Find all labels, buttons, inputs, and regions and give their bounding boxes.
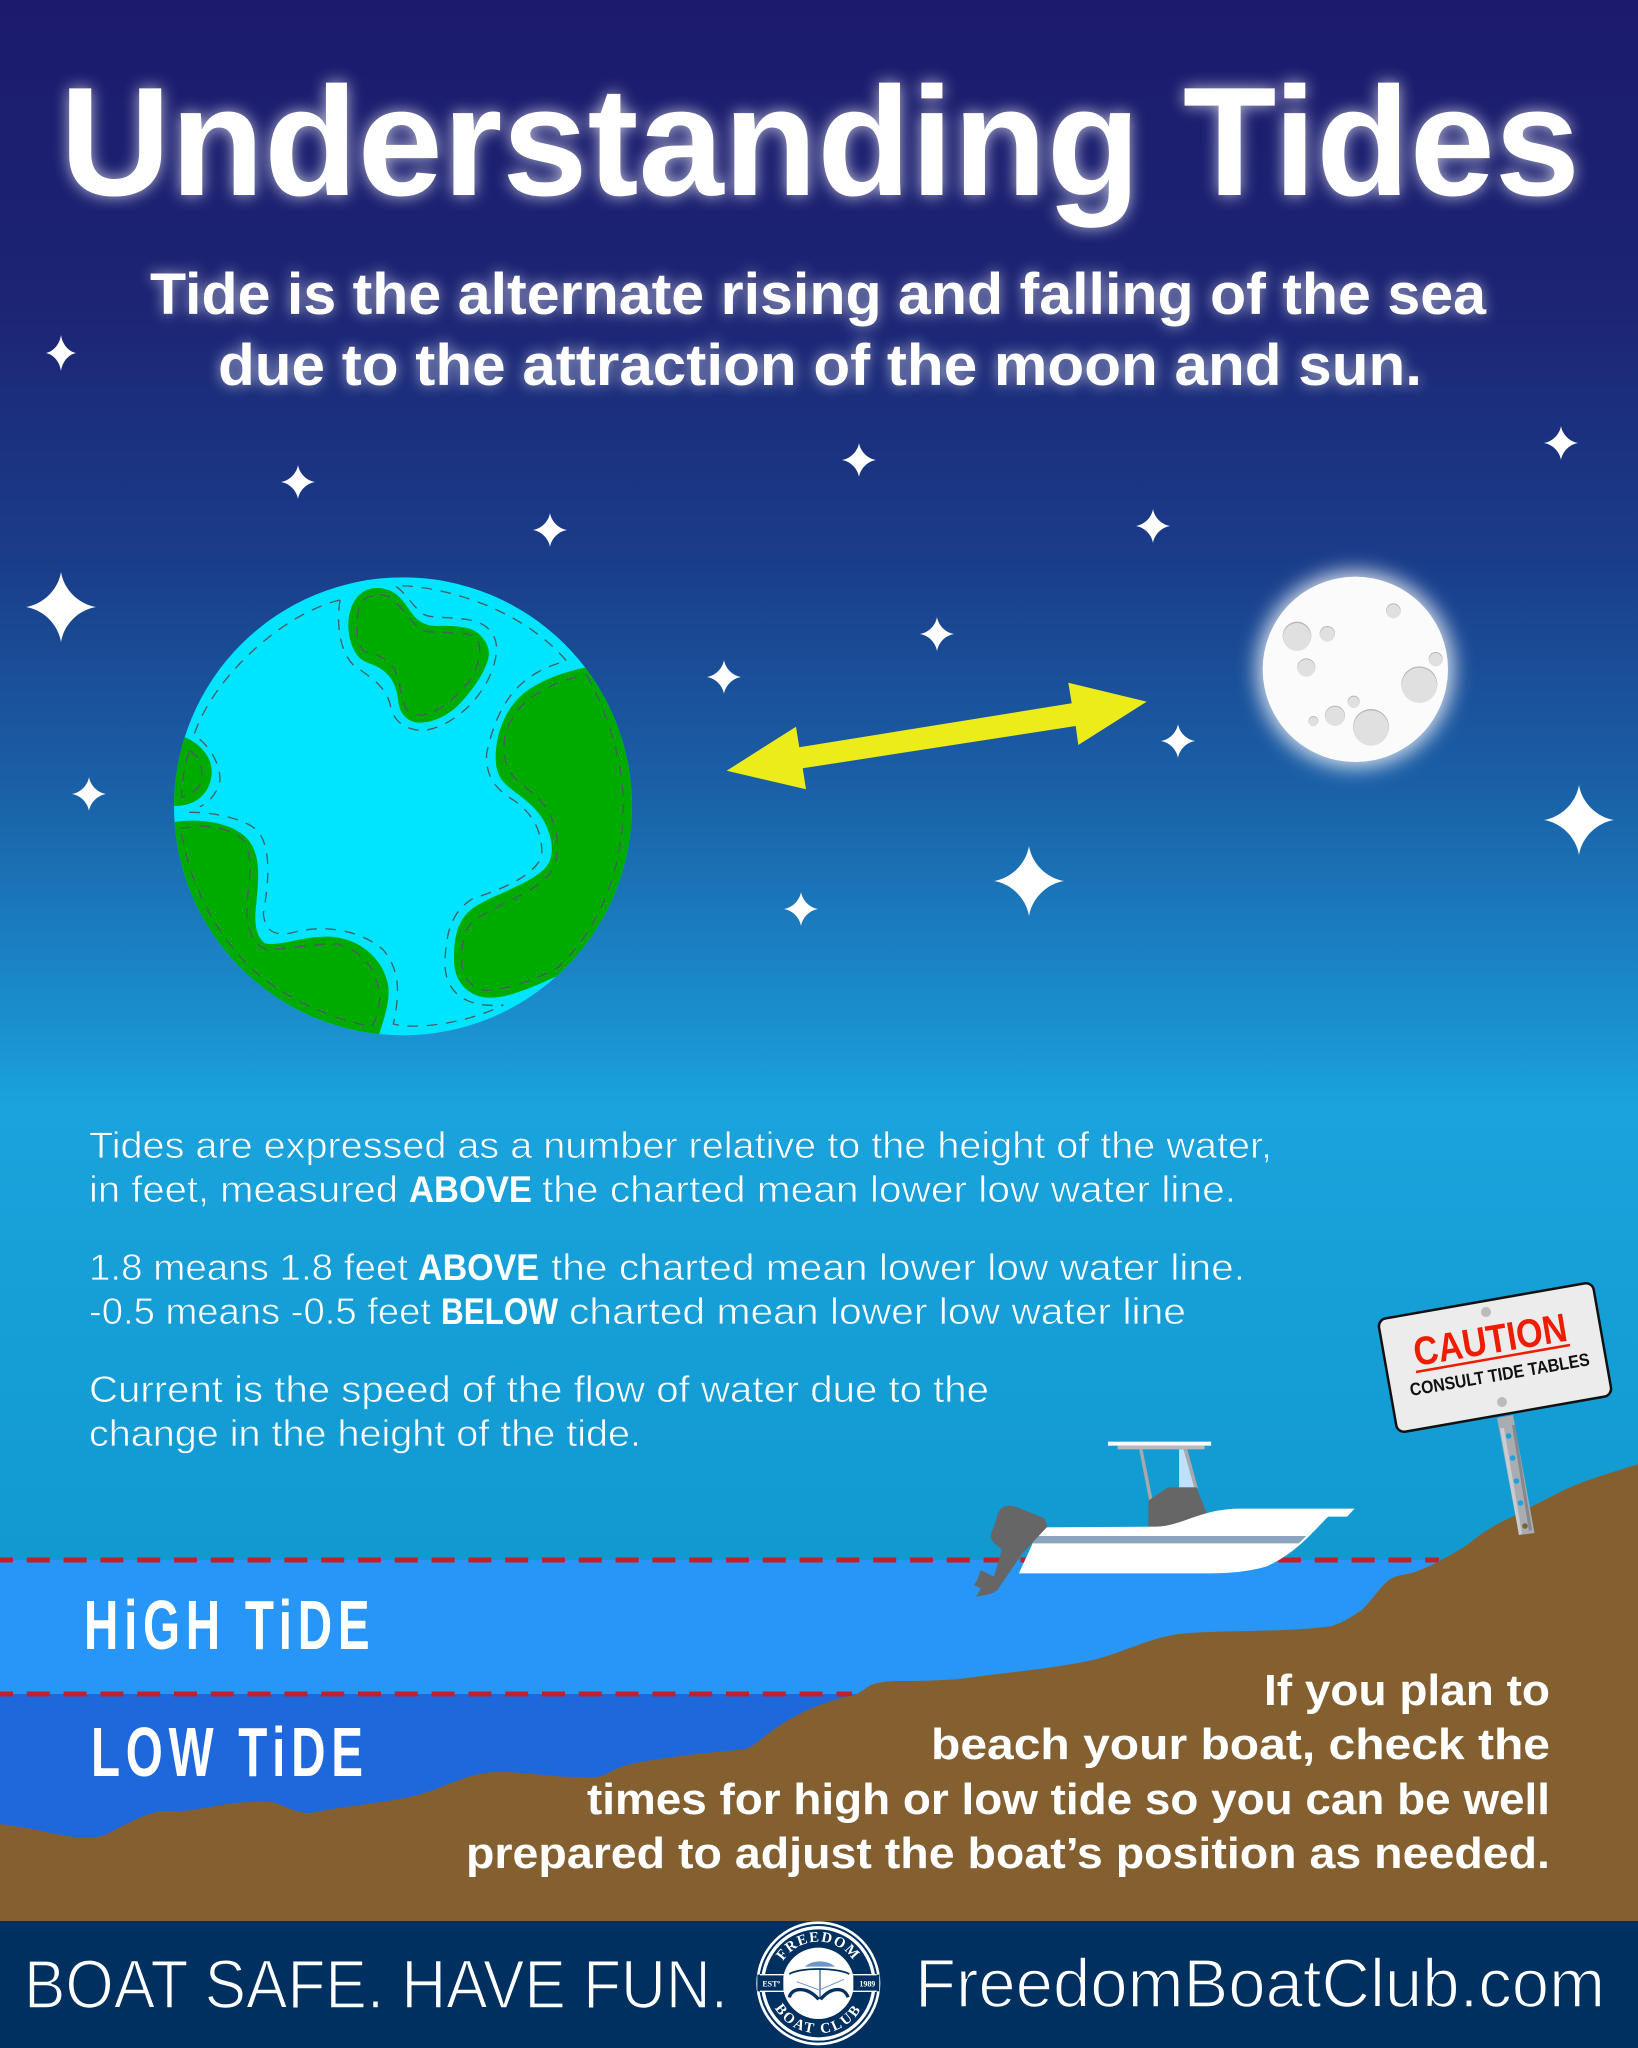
title: Understanding Tides — [60, 55, 1580, 228]
logo: Freedom Boat Club badge: FREEDOM — [776, 1932, 860, 1961]
text block: tide explanation: Current is the speed of the flow of water due to the — [89, 1369, 989, 1410]
label: low tide: LOW TiDE — [91, 1713, 363, 1791]
text block: tide explanation — [89, 1125, 1272, 1454]
text block: tide explanation: charted mean lower low water line — [569, 1291, 1186, 1332]
high tide dashed line — [0, 1558, 1439, 1562]
logo: Freedom Boat Club badge: 1989 — [859, 1979, 875, 1988]
subtitle: due to the attraction of the moon and sun. — [218, 333, 1422, 398]
text block: beach advice: If you plan to — [1264, 1666, 1550, 1715]
arrow: earth to moon double-headed — [727, 683, 1147, 789]
earth — [150, 577, 650, 1035]
high tide water band — [0, 1560, 1638, 1694]
logo: Freedom Boat Club badge: ESTº — [762, 1979, 780, 1988]
moon — [1257, 571, 1454, 768]
boat — [974, 1442, 1355, 1597]
caution sign: CAUTION — [1410, 1306, 1570, 1375]
text block: tide explanation: ABOVE — [418, 1247, 539, 1288]
caution sign: CONSULT TIDE TABLES — [1408, 1349, 1591, 1400]
text block: beach advice: beach your boat, check the — [931, 1720, 1550, 1769]
subtitle — [150, 262, 1487, 398]
text block: tide explanation: in feet, measured — [89, 1169, 398, 1210]
text block: beach advice: times for high or low tide so you can be well — [587, 1775, 1550, 1824]
low tide dashed line — [0, 1692, 852, 1696]
caution sign post — [1497, 1415, 1534, 1535]
text block: tide explanation: BELOW — [441, 1291, 558, 1332]
footer bar — [0, 1921, 1638, 2048]
text block: tide explanation: the charted mean lower low water line. — [551, 1247, 1245, 1288]
logo: Freedom Boat Club badge — [756, 1921, 880, 2046]
subtitle: Tide is the alternate rising and falling of the sea — [150, 262, 1487, 327]
caution sign — [1378, 1282, 1612, 1433]
text block: tide explanation: ABOVE — [409, 1169, 532, 1210]
background: night sky gradient — [0, 0, 1638, 1560]
stars — [26, 335, 1614, 926]
text block: tide explanation: the charted mean lower low water line. — [542, 1169, 1236, 1210]
text block: tide explanation: -0.5 means -0.5 feet — [89, 1291, 432, 1332]
text block: tide explanation: 1.8 means 1.8 feet — [89, 1247, 409, 1288]
text block: tide explanation: Tides are expressed as a number relative to the height of the water, — [89, 1125, 1272, 1166]
low tide water band — [0, 1694, 1638, 1844]
footer url: FreedomBoatClub.com — [915, 1945, 1605, 2022]
text block: beach advice: prepared to adjust the boat’s position as needed. — [466, 1829, 1550, 1878]
text block: tide explanation: change in the height of the tide. — [89, 1413, 641, 1454]
text block: beach advice — [466, 1666, 1550, 1878]
land: sloping beach — [0, 1464, 1638, 1921]
footer slogan: BOAT SAFE. HAVE FUN. — [24, 1946, 728, 2023]
logo: Freedom Boat Club badge: BOAT CLUB — [774, 2002, 860, 2033]
label: high tide: HiGH TiDE — [84, 1586, 370, 1664]
